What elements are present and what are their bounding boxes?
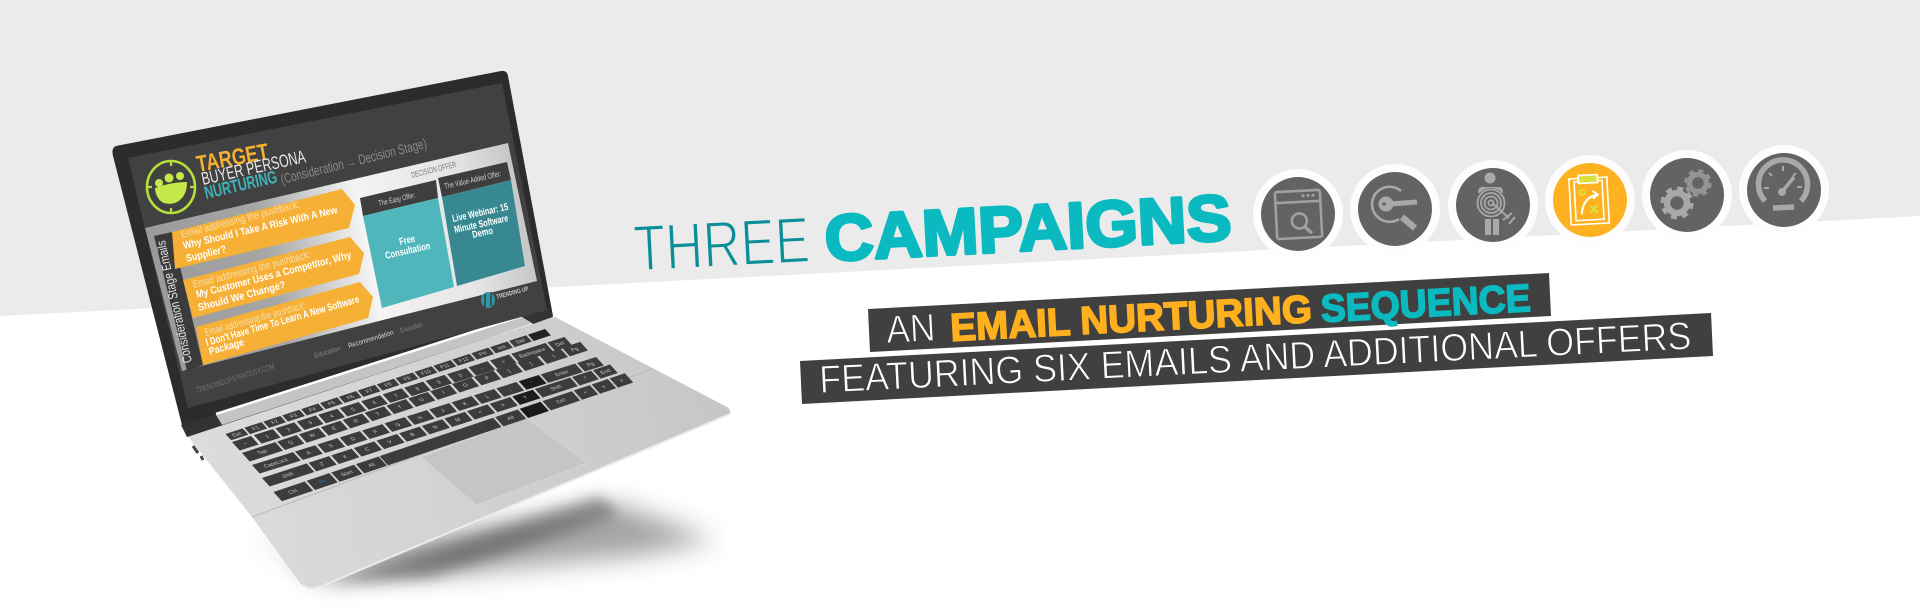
keyboard row: ZXCV: ? <box>523 395 529 401</box>
keyboard row: ASDF <box>252 357 604 474</box>
keyboard row: function keys: F8 <box>384 382 394 388</box>
keyboard row: numbers: 0 <box>457 373 464 379</box>
icon: browser search <box>1253 169 1343 259</box>
keyboard row: numbers: 8 <box>415 387 421 392</box>
easy offer card: The Easy Offer: <box>377 191 416 208</box>
keyboard row: ZXCV <box>262 365 618 487</box>
keyboard row: function keys: F4 <box>308 407 318 413</box>
keyboard row: bottom <box>274 373 633 501</box>
slide title: NURTURING: NURTURING <box>202 167 279 203</box>
vertical band: Consideration Stage Emails <box>153 239 195 365</box>
keyboard row: function keys: F5 <box>327 401 337 407</box>
email arrow 3: Email addressing the pushback: <box>204 300 307 339</box>
keyboard row: function keys: F6 <box>346 394 356 401</box>
left hinge <box>181 415 222 437</box>
laptop lid <box>112 71 553 437</box>
keyboard row: numbers <box>232 337 572 451</box>
vertical band <box>153 232 203 371</box>
text: SEQUENCE: SEQUENCE <box>1320 277 1532 331</box>
keyboard row: ZXCV: M <box>454 417 463 423</box>
easy offer card: Free <box>398 234 417 248</box>
keyboard row: numbers: 4 <box>329 414 336 419</box>
text: featuring six emails: FEATURING SIX EMAILS AND ADDITIONAL OFFERS <box>818 315 1692 402</box>
slide title: TARGET: TARGET <box>194 138 271 177</box>
title: THREE: THREE <box>632 203 811 285</box>
keyboard row: ZXCV: N <box>432 425 440 430</box>
email arrow 3: I Don't Have Time To Learn A New Software <box>205 293 361 349</box>
keyboard row: ASDF: CapsLock <box>263 458 290 469</box>
keyboard row: function keys: Ins <box>497 345 508 351</box>
slide subtitle: (Consideration → Decision Stage) <box>279 135 428 187</box>
keyboard row: ASDF: G <box>394 422 402 428</box>
keyboard row: QWERTY: Q <box>287 440 295 446</box>
keyboard row: ASDF: ' <box>530 381 535 385</box>
text: EMAIL NURTURING: EMAIL NURTURING <box>949 288 1313 350</box>
brand logo: TRENDING UP <box>496 286 530 301</box>
easy offer card <box>360 180 454 308</box>
keyboard row: function keys: F2 <box>270 419 280 426</box>
keyboard row: ZXCV: < <box>477 410 484 416</box>
keyboard row: function keys: F3 <box>289 413 299 419</box>
keyboard row: QWERTY: Y <box>396 404 404 410</box>
keyboard row: QWERTY: E <box>331 426 339 432</box>
icon: key and magnifier <box>1350 164 1440 254</box>
footer url: TRENDINGUPSTRATEGY.COM <box>195 362 276 395</box>
text: AN: AN <box>885 306 936 352</box>
keyboard row: numbers: 3 <box>307 421 314 426</box>
easy offer card: Consultation <box>384 241 431 262</box>
screen <box>128 83 547 408</box>
keyboard row: function keys: F10 <box>420 369 433 377</box>
keyboard row: ASDF: K <box>462 401 470 407</box>
keyboard row: ZXCV: X <box>341 454 349 460</box>
keyboard row: bottom: Fn <box>318 479 328 485</box>
keyboard row: QWERTY: \ <box>551 354 557 359</box>
keyboard row: ASDF: Enter <box>554 370 571 378</box>
keyboard row: QWERTY: O <box>462 383 470 389</box>
keyboard row: ASDF: L <box>484 394 491 400</box>
keyboard row: numbers: 5 <box>350 407 357 412</box>
email arrow 3 <box>196 282 373 365</box>
email arrow 1: Supplier? <box>185 243 228 265</box>
brand logo <box>481 286 530 308</box>
keyboard row: numbers: 1 <box>264 434 271 440</box>
footer nav: Recommendation <box>348 329 395 350</box>
keyboard row: numbers: 9 <box>436 380 443 385</box>
keyboard row: ZXCV: Shift <box>281 472 296 480</box>
laptop contact shadow <box>325 496 620 584</box>
keyboard row: function keys: Prt <box>478 351 489 357</box>
keyboard row: QWERTY: [ <box>507 369 513 374</box>
icon: person with target <box>1448 160 1538 250</box>
email arrow 1: Why Should I Take A Risk With A New <box>182 204 339 252</box>
keyboard row: ASDF: J <box>440 408 447 414</box>
keyboard row: ZXCV: C <box>364 447 372 453</box>
keyboard row: QWERTY: R <box>353 419 360 424</box>
keyboard row: QWERTY: U <box>418 397 426 403</box>
keyboard row: QWERTY: T <box>375 411 383 417</box>
footer nav: Education <box>314 345 341 360</box>
keyboard row: function keys <box>226 329 551 440</box>
base front edge <box>303 414 730 588</box>
value-added offer card: The Value-Added Offer: <box>443 169 502 191</box>
keyboard row: numbers: 6 <box>372 400 379 406</box>
keyboard row: numbers: = <box>500 360 507 365</box>
keyboard row: ZXCV: Z <box>319 462 327 467</box>
keyboard row: ASDF: S <box>328 443 335 449</box>
keyboard row: numbers: Backspace <box>518 347 548 359</box>
keyboard row: ASDF: Pg <box>586 362 596 368</box>
trackpad <box>421 418 587 505</box>
email arrow 1: Email addressing the pushback: <box>180 199 301 241</box>
background: angled grey band <box>0 0 1920 316</box>
keyboard row: numbers: 7 <box>393 394 400 399</box>
headline bars <box>800 273 1713 404</box>
icon: speedometer <box>1739 145 1829 235</box>
keyboard row: function keys: F1 <box>251 425 261 432</box>
value-added offer card: Minute Software <box>453 213 510 236</box>
email arrow 2 <box>183 237 364 318</box>
keyboard row: QWERTY: Pg <box>570 347 580 353</box>
laptop base deck <box>187 317 730 588</box>
slide logo: target people <box>146 160 196 214</box>
keyboard row: ZXCV: Shift <box>549 384 564 392</box>
keyboard row: bottom: < <box>582 390 589 396</box>
keyboard row: QWERTY: P <box>484 376 492 381</box>
keyboard row: ASDF: A <box>305 450 313 456</box>
screen gradient panel <box>145 143 537 371</box>
hinge strip <box>216 317 532 425</box>
keyboard row: function keys: F9 <box>402 376 413 382</box>
footer nav <box>314 321 424 360</box>
keyboard row: bottom: Alt <box>506 415 517 422</box>
email arrow 2: My Customer Uses a Competitor, Why <box>195 249 353 301</box>
keyboard row: function keys: F12 <box>458 357 471 364</box>
keyboard <box>226 329 633 501</box>
keyboard row: bottom: Alt <box>367 462 377 469</box>
keyboard row: ZXCV: B <box>409 432 417 438</box>
icon row <box>1253 145 1829 259</box>
keyboard row: ZXCV: V <box>387 439 394 445</box>
laptop shadow <box>255 505 715 578</box>
keyboard row: ZXCV: ^ <box>583 376 590 381</box>
value-added offer card: Live Webinar: 15 <box>451 202 510 225</box>
slide title: BUYER PERSONA: BUYER PERSONA <box>200 146 307 189</box>
keyboard row: QWERTY <box>242 342 588 462</box>
footer nav: Execution <box>400 321 424 335</box>
keyboard row: ZXCV: > <box>500 403 507 408</box>
keyboard row: numbers: - <box>480 367 485 372</box>
email arrow 1 <box>172 189 355 269</box>
keyboard row: bottom: Ctrl <box>555 398 567 405</box>
keyboard row: bottom: Start <box>340 470 355 478</box>
keyboard row: bottom: Ctrl <box>287 488 299 496</box>
keyboard row: QWERTY: W <box>308 433 318 439</box>
icon: gears <box>1642 150 1732 240</box>
keyboard row: ASDF: ; <box>508 388 513 393</box>
keyboard row: numbers: 2 <box>286 427 293 433</box>
keyboard row: function keys: F7 <box>365 388 375 395</box>
keyboard row: function keys: Del <box>515 338 527 345</box>
keyboard row: function keys: F11 <box>439 363 452 370</box>
laptop <box>112 71 730 588</box>
keyboard row: ZXCV: End <box>599 368 613 376</box>
title: CAMPAIGNS: CAMPAIGNS <box>823 181 1233 275</box>
side ports <box>193 446 203 460</box>
keyboard row: numbers: ~ <box>242 441 249 447</box>
email arrow 2: Should We Change? <box>197 279 287 314</box>
decision offer label: DECISION OFFER <box>410 159 457 180</box>
bar 2 <box>800 313 1713 404</box>
value-added offer card: Demo <box>471 226 494 241</box>
right hinge <box>522 307 553 324</box>
icon: clipboard strategy <box>1545 155 1635 245</box>
title <box>632 181 1233 285</box>
keyboard row: QWERTY: I <box>441 390 447 395</box>
palm rest seam <box>252 369 652 517</box>
email arrow 2: Email addressing the pushback: <box>192 249 312 291</box>
hinge highlight <box>216 316 522 414</box>
keyboard row: QWERTY: Tap <box>256 449 269 456</box>
screen background <box>128 83 547 408</box>
keyboard row: QWERTY: ] <box>529 362 535 367</box>
keyboard row: ASDF: D <box>350 436 358 442</box>
email arrow 3: Package <box>208 336 246 358</box>
keyboard row: numbers: Del <box>554 341 566 348</box>
keyboard row: bottom: > <box>618 378 625 384</box>
keyboard row: function keys: Esc <box>231 431 244 439</box>
keyboard row: ASDF: F <box>372 429 380 435</box>
keyboard row: bottom: v <box>601 384 608 390</box>
keyboard row: ASDF: H <box>417 415 425 421</box>
value-added offer card <box>438 162 525 286</box>
bar 1 <box>868 273 1551 352</box>
